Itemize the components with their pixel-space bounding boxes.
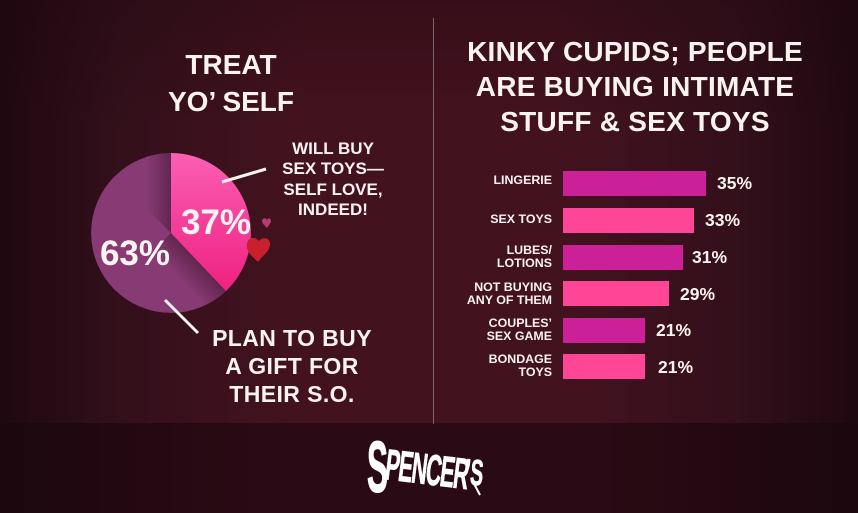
center divider [433,18,434,424]
bar chart: 21% [658,357,693,377]
bar chart: 35% [717,173,752,193]
bar chart: 29% [680,284,715,304]
bar chart: 21% [656,320,691,340]
heading: treat yo' self: TREAT [185,49,277,80]
heading: kinky cupids: KINKY CUPIDS; PEOPLE [467,36,803,67]
callout text: will buy sex toys: SELF LOVE, [283,180,383,199]
row: couples' sex game [487,316,552,343]
logo: Spencer's [367,435,485,500]
row: sex toys: SEX TOYS [490,212,552,226]
callout text: will buy sex toys [282,139,384,219]
row: lingerie: LINGERIE [493,173,552,187]
callout text: plan to buy a gift: PLAN TO BUY [212,325,372,351]
icon: small pink heart [262,218,271,228]
row: lubes/lotions: LUBES/ [507,243,552,257]
callout line: plan to buy [165,300,198,333]
icon: large red heart [247,238,270,262]
heading: kinky cupids: STUFF & SEX TOYS [500,106,770,137]
pie chart [91,153,271,334]
bar chart: 31% [692,247,727,267]
row: lubes/lotions: LOTIONS [497,256,552,270]
callout text: plan to buy a gift: THEIR S.O. [229,381,355,407]
pie: 37% slice [171,153,251,291]
heading: treat yo' self [168,49,294,116]
pie value: 37%: 37% [181,203,251,242]
row: lubes/lotions [497,243,552,270]
callout line: will buy [222,169,266,182]
logo: Spencer's: PENCER [383,441,472,499]
row: not buying: ANY OF THEM [467,293,552,307]
row: couples' sex game: SEX GAME [487,329,552,343]
pie value: 63%: 63% [100,234,170,273]
row: not buying: NOT BUYING [474,280,552,294]
callout text: will buy sex toys: INDEED! [298,200,368,219]
row: not buying [467,280,552,307]
callout text: will buy sex toys: SEX TOYS— [282,159,384,178]
callout text: plan to buy a gift: A GIFT FOR [225,353,359,379]
callout text: plan to buy a gift [212,325,372,407]
bar chart: 33% [705,210,740,230]
footer band [0,423,858,513]
row: couples' sex game: COUPLES’ [489,316,552,330]
heading: kinky cupids [467,36,803,137]
row: bondage toys: TOYS [518,365,552,379]
bar chart [467,171,752,379]
heading: treat yo' self: YO’ SELF [168,86,294,116]
row: bondage toys: BONDAGE [489,352,552,366]
row: bondage toys [489,352,552,379]
callout text: will buy sex toys: WILL BUY [292,139,374,158]
pie: 63% slice [91,153,251,313]
logo: Spencer's: ’S [463,453,485,494]
heading: kinky cupids: ARE BUYING INTIMATE [476,71,794,102]
